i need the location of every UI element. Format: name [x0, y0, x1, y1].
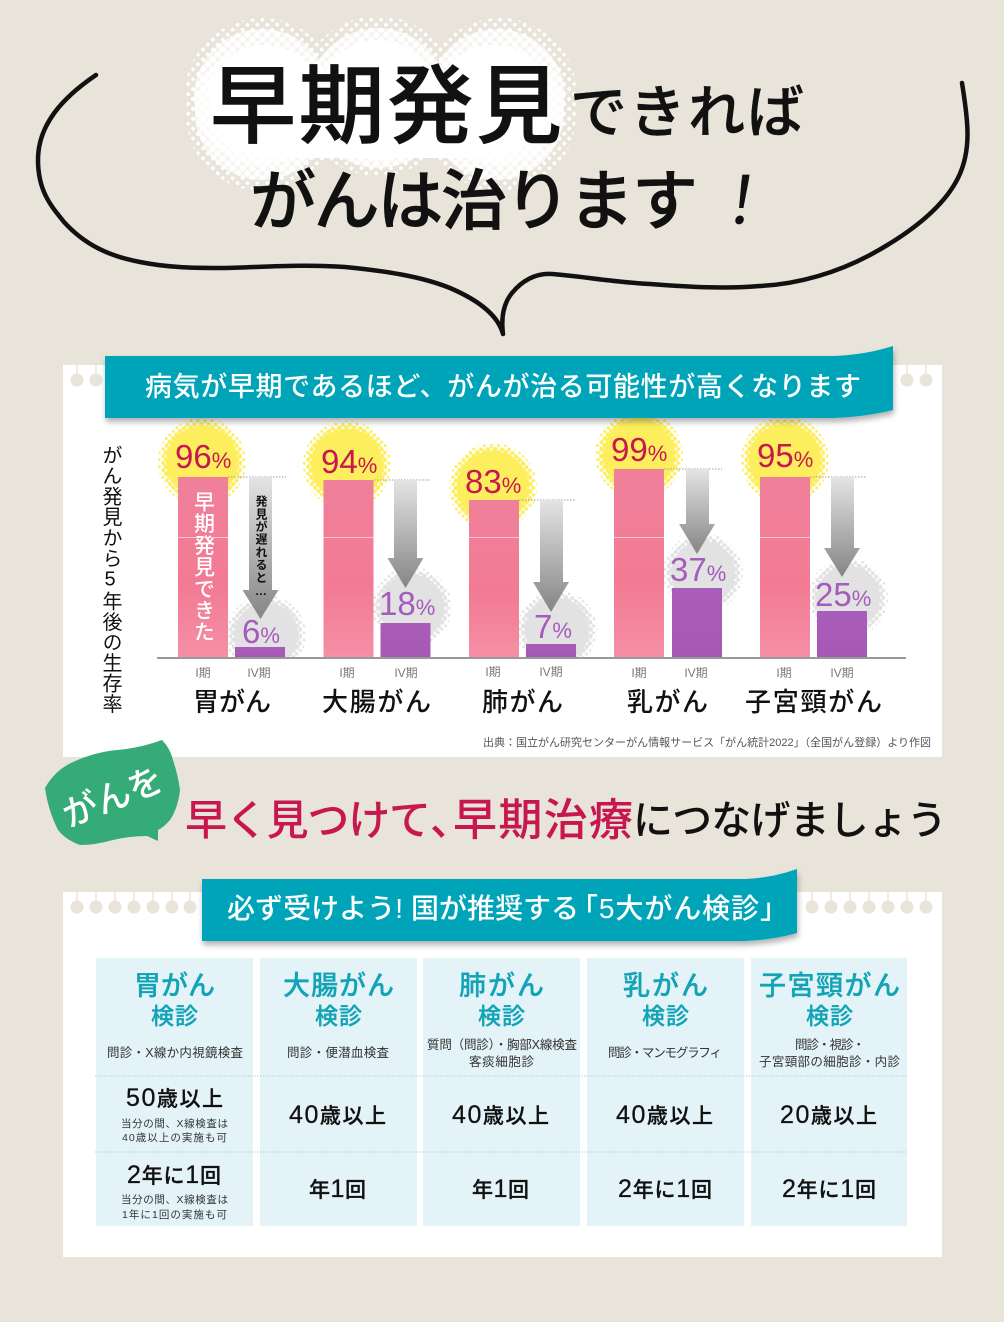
target ages: 40歳以上: [616, 1101, 713, 1129]
target ages: 40歳以上: [452, 1101, 549, 1129]
green speech bubble: がんを: [57, 760, 169, 835]
y axis label: がん発見から5年後の生存率: [99, 445, 122, 714]
vertical label on first bar: 早期発見できた: [192, 491, 215, 643]
stomach screening notes: 当分の間、X線検査は: [121, 1193, 228, 1206]
target ages: 20歳以上: [780, 1101, 877, 1129]
stage IV percentages: 7%: [534, 608, 572, 645]
yellow halftone circles: [158, 411, 829, 531]
target ages: 40歳以上: [289, 1101, 386, 1129]
frequency: 年1回: [472, 1175, 529, 1203]
cancer type labels: 大腸がん: [322, 687, 431, 717]
gray halftone circles: [228, 534, 888, 657]
speech bubble outline: [38, 75, 968, 334]
stage I percentages: 95%: [757, 437, 813, 474]
message line: [185, 796, 947, 845]
down arrows: [242, 469, 860, 619]
stage I percentages: [175, 431, 813, 500]
stage tick labels: I期: [339, 666, 355, 680]
stage I percentages: 83%: [465, 463, 521, 500]
stomach screening notes: 40歳以上の実施も可: [122, 1131, 227, 1144]
stage tick labels: IV期: [539, 665, 563, 679]
test descriptions: 問診・マンモグラフィ: [608, 1045, 722, 1060]
title: [210, 59, 804, 239]
column backgrounds: [96, 958, 907, 1226]
message line: 早期治療: [453, 796, 633, 845]
column headings: 乳がん: [623, 971, 708, 1001]
banner: chart heading: 病気が早期であるほど、がんが治る可能性が高くなります: [145, 372, 861, 402]
test descriptions: 問診・X線か内視鏡検査: [107, 1045, 243, 1060]
frequency: 2年に1回: [782, 1175, 876, 1203]
title: がんは治ります: [250, 164, 698, 238]
stage tick labels: IV期: [830, 666, 854, 680]
stage IV percentages: 25%: [815, 576, 871, 613]
column headings: [134, 971, 900, 1029]
column headings: 子宮頸がん: [759, 971, 900, 1001]
test descriptions: 客痰細胞診: [469, 1054, 534, 1069]
target ages: [126, 1084, 877, 1129]
message line: 早く見つけて: [185, 797, 431, 844]
cancer type labels: 乳がん: [627, 687, 708, 717]
stage I percentages: 96%: [175, 438, 231, 475]
message line: 、: [430, 797, 472, 844]
banner: table heading: 国が推奨する: [411, 893, 579, 924]
stomach screening notes: [121, 1117, 228, 1221]
title: 早期発見: [210, 59, 562, 155]
source note: 出典：国立がん研究センターがん情報サービス「がん統計2022」（全国がん登録）より作図: [483, 735, 931, 749]
stage IV percentages: 37%: [670, 551, 726, 588]
stage tick labels: [195, 665, 854, 680]
dotted row separators: [95, 1076, 908, 1152]
column headings: 大腸がん: [283, 971, 394, 1001]
stage IV percentages: 18%: [379, 585, 435, 622]
paper holes row: [70, 892, 932, 914]
stage IV percentages: [242, 551, 871, 650]
column headings: 検診: [315, 1003, 362, 1029]
stage tick labels: I期: [485, 665, 501, 679]
panel: survival rate chart: [63, 365, 942, 757]
paper holes: [70, 365, 932, 386]
stage tick labels: I期: [195, 666, 211, 680]
cancer type labels: 肺がん: [482, 687, 563, 717]
column headings: 検診: [642, 1003, 689, 1029]
cancer type labels: [193, 687, 882, 717]
banner: table heading: 「5大がん検診」: [570, 893, 788, 924]
stage tick labels: IV期: [684, 666, 708, 680]
pink stage I bars: [178, 469, 810, 658]
stage IV percentages: 6%: [242, 613, 280, 650]
stage I percentages: 99%: [611, 431, 667, 468]
frequency: 2年に1回: [127, 1161, 221, 1189]
frequency: 2年に1回: [618, 1175, 712, 1203]
test descriptions: 子宮頸部の細胞診・内診: [759, 1054, 900, 1069]
bar highlight lines: [178, 537, 810, 538]
frequency: [127, 1161, 876, 1203]
dotted reference lines: [228, 469, 867, 500]
cancer type labels: 胃がん: [193, 687, 271, 717]
stage I percentages: 94%: [321, 443, 377, 480]
title: できれば: [570, 81, 804, 145]
halftone cloud behind title: [185, 16, 577, 191]
banner: table heading: 必ず受けよう!: [227, 893, 403, 924]
test descriptions: 問診・視診・: [795, 1037, 865, 1052]
vertical label on first arrow: 発見が遅れると…: [254, 495, 268, 599]
test descriptions: 質問（問診）・胸部X線検査: [427, 1037, 577, 1052]
test descriptions: [107, 1037, 900, 1069]
test descriptions: 問診・便潜血検査: [287, 1045, 389, 1060]
chart baseline: [157, 657, 906, 659]
column headings: 検診: [478, 1003, 525, 1029]
stomach screening notes: 1年に1回の実施も可: [122, 1208, 227, 1221]
stage tick labels: I期: [631, 666, 647, 680]
column headings: 胃がん: [134, 971, 215, 1001]
column headings: 検診: [151, 1003, 198, 1029]
message line: につなげましょう: [633, 799, 947, 843]
column headings: 検診: [806, 1003, 853, 1029]
cancer type labels: 子宮頸がん: [745, 687, 882, 717]
panel: screening table: [63, 892, 942, 1257]
banner: table heading: [202, 869, 797, 941]
banner: chart heading: [105, 346, 893, 418]
green speech bubble: [45, 740, 180, 845]
stomach screening notes: 当分の間、X線検査は: [121, 1117, 228, 1130]
stage tick labels: I期: [776, 666, 792, 680]
purple stage IV bars: [235, 588, 867, 658]
frequency: 年1回: [309, 1175, 366, 1203]
target ages: 50歳以上: [126, 1084, 223, 1112]
stage tick labels: IV期: [394, 666, 418, 680]
column headings: 肺がん: [459, 971, 544, 1001]
stage tick labels: IV期: [247, 666, 271, 680]
title: ！: [704, 165, 780, 239]
